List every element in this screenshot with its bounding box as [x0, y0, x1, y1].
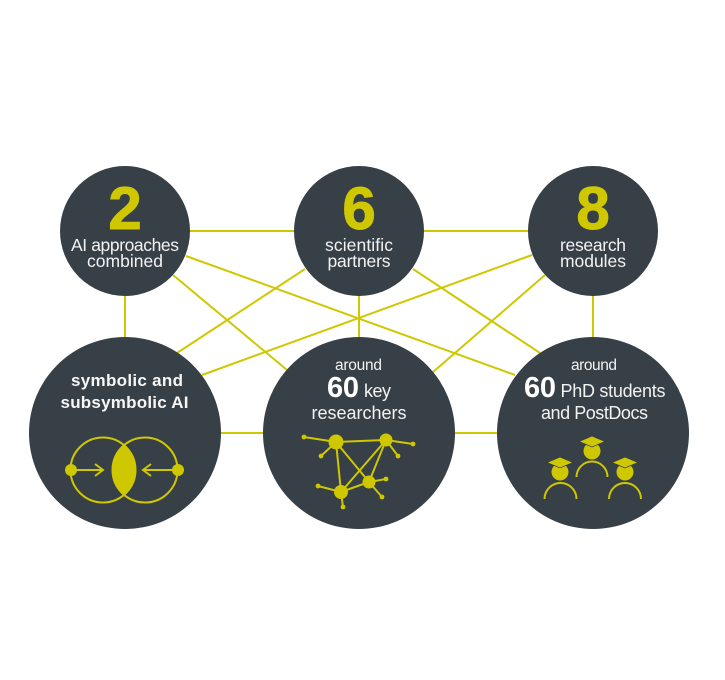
- circle: around 60 key researchers: researchers: [312, 403, 406, 423]
- circle: 2 AI approaches: AI approaches: [71, 235, 179, 255]
- circle: around 60 key researchers: key: [364, 381, 391, 401]
- circle: around 60 key researchers: 60: [327, 372, 359, 404]
- circle: 6 scientific partners: partners: [328, 251, 391, 271]
- icon: graduate left: [544, 457, 576, 499]
- connecting lines: [125, 231, 593, 433]
- circle: around 60 key researchers: around: [335, 357, 382, 374]
- circle: around 60 PhD students and PostDocs: around: [571, 357, 617, 374]
- circle: around 60 key researchers: [263, 337, 455, 529]
- circle: 2 AI approaches: 2: [108, 175, 142, 242]
- circle: symbolic and subsymbolic AI: symbolic and: [71, 371, 183, 390]
- circle: 6 scientific partners: 6: [342, 175, 376, 242]
- circle: around 60 PhD students and PostDocs: PhD students: [560, 381, 666, 401]
- circle: symbolic and subsymbolic AI: [29, 337, 221, 529]
- circle: around 60 PhD students and PostDocs: and PostDocs: [541, 403, 648, 423]
- icon: graduate right: [609, 457, 641, 499]
- circle: around 60 PhD students and PostDocs: 60: [524, 372, 556, 404]
- circle: symbolic and subsymbolic AI: subsymbolic AI: [60, 393, 188, 412]
- icon: graduate top: [576, 436, 608, 477]
- circle: 8 research modules: 8: [576, 175, 610, 242]
- circle: 8 research modules: modules: [560, 251, 626, 271]
- circle: 6 scientific partners: scientific: [325, 235, 393, 255]
- circle: 6 scientific partners: [294, 166, 424, 296]
- icon: overlapping circles with arrows: [65, 438, 184, 502]
- icon: network graph: [302, 434, 415, 509]
- circle: around 60 PhD students and PostDocs: [497, 337, 689, 529]
- circle: 8 research modules: [528, 166, 658, 296]
- circle: 2 AI approaches: [60, 166, 190, 296]
- circle: 8 research modules: research: [560, 235, 626, 255]
- circle: 2 AI approaches: combined: [87, 251, 163, 271]
